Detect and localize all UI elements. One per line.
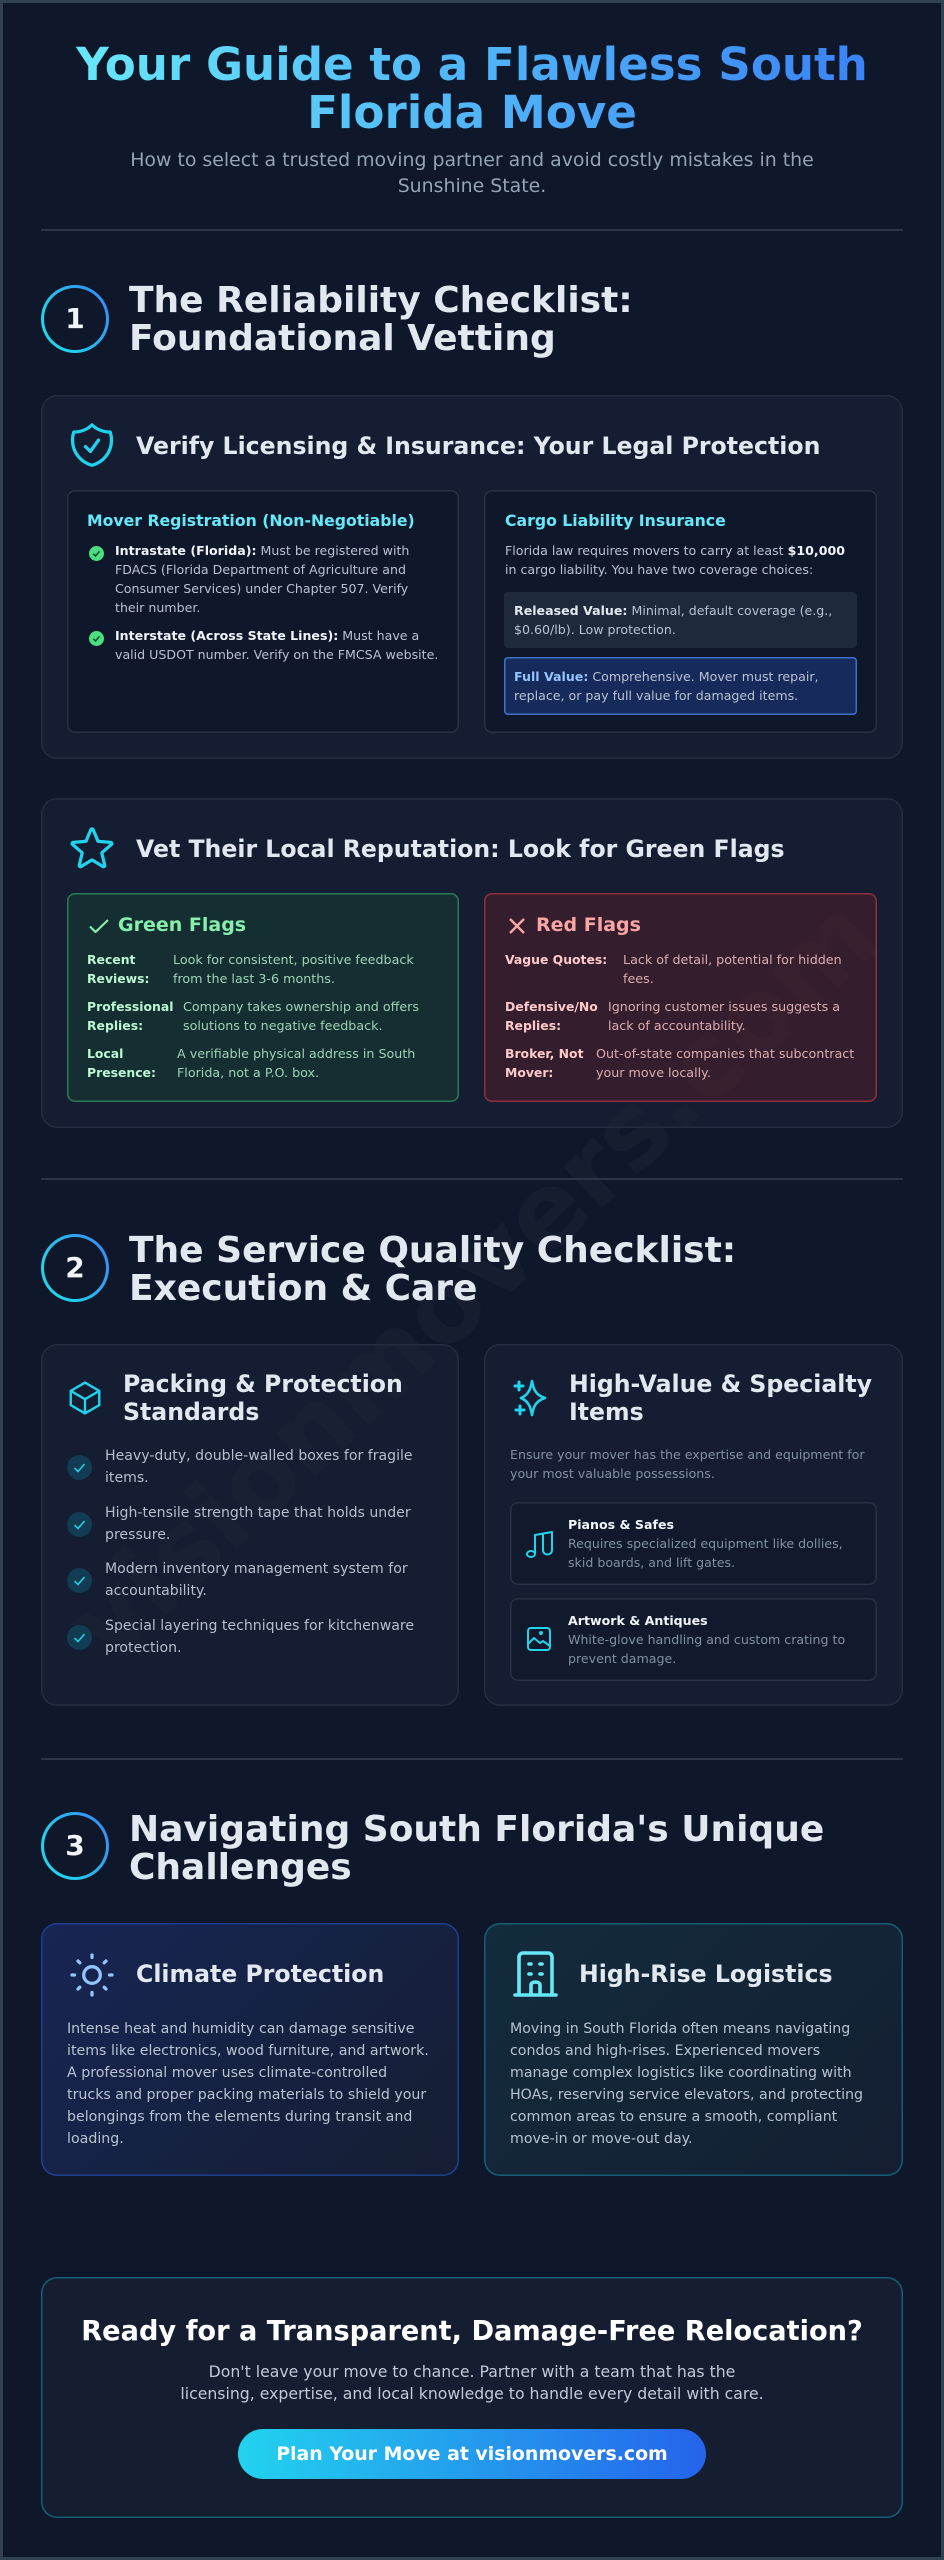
pianos title: Pianos & Safes — [568, 1516, 674, 1532]
icon: music note — [526, 1531, 553, 1558]
panel: high-value items — [484, 1344, 903, 1706]
heading text 3: Challenges — [129, 1846, 352, 1888]
icon: check mark — [89, 919, 109, 933]
pianos text: skid boards, and lift gates. — [568, 1554, 735, 1570]
interstate requirement: Interstate (Across State Lines): Must have a — [115, 628, 419, 642]
panel heading: Items — [569, 1398, 644, 1426]
heading text 2: Execution & Care — [129, 1268, 477, 1308]
section heading 2 — [41, 1230, 736, 1308]
released value option — [504, 592, 857, 648]
local presence — [87, 1046, 415, 1080]
intrastate requirement: FDACS (Florida Department of Agriculture and — [115, 562, 406, 576]
professional replies: solutions to negative feedback. — [183, 1018, 382, 1033]
cargo liability text: Florida law requires movers to carry at least $10,000 — [505, 542, 845, 558]
high-rise text: move-in or move-out day. — [510, 2131, 693, 2147]
broker not mover — [505, 1046, 854, 1080]
heading text 2: The Service Quality Checklist: — [129, 1230, 736, 1270]
interstate requirement: valid USDOT number. Verify on the FMCSA website. — [115, 646, 438, 662]
recent reviews: from the last 3-6 months. — [173, 970, 335, 986]
check item 2: pressure. — [105, 1527, 170, 1543]
number badge 1: 1 — [65, 302, 85, 335]
intrastate requirement: their number. — [115, 600, 200, 614]
heading text 2 — [129, 1230, 736, 1308]
panel: packing standards — [41, 1344, 459, 1706]
artwork text: prevent damage. — [568, 1650, 676, 1666]
panel: climate protection — [41, 1923, 459, 2176]
number badge 2: 2 — [65, 1251, 85, 1284]
defensive replies: Replies: — [505, 1018, 561, 1033]
icon: x mark — [509, 918, 525, 934]
icon: picture — [527, 1627, 551, 1651]
high-rise text: Moving in South Florida often means navigating — [510, 2021, 850, 2037]
recent reviews — [87, 952, 414, 986]
icon: green check — [89, 631, 104, 646]
heading text 1: Foundational Vetting — [129, 318, 556, 358]
vague quotes: fees. — [623, 970, 654, 986]
vague quotes: Vague Quotes: — [505, 952, 607, 966]
panel heading: Climate Protection — [136, 1960, 384, 1988]
cargo liability box — [484, 490, 877, 733]
call to action text — [41, 2361, 903, 2405]
check item 3: accountability. — [105, 1583, 207, 1599]
panel: verify licensing and insurance — [41, 395, 903, 759]
icon: shield check — [70, 423, 114, 467]
check item 1: items. — [105, 1470, 149, 1486]
defensive replies: Ignoring customer issues suggests a — [608, 999, 840, 1014]
released value option: $0.60/lb). Low protection. — [514, 622, 676, 637]
local presence: A verifiable physical address in South — [177, 1046, 415, 1061]
title — [72, 41, 872, 137]
broker not mover: Out-of-state companies that subcontract — [596, 1046, 854, 1061]
panel heading: Standards — [123, 1398, 259, 1426]
cargo liability heading: Cargo Liability Insurance — [505, 511, 726, 530]
cargo liability text: in cargo liability. You have two coverage choices: — [505, 562, 813, 576]
icon: building — [513, 1951, 558, 1997]
recent reviews: Look for consistent, positive feedback — [173, 952, 414, 966]
pianos text: Requires specialized equipment like dollies, — [568, 1536, 843, 1550]
check item 3: Modern inventory management system for — [105, 1561, 408, 1577]
heading text 3 — [129, 1808, 824, 1888]
watermark: visionmovers.com — [43, 874, 901, 1686]
climate text: loading. — [67, 2131, 124, 2147]
heading text 1 — [129, 280, 633, 358]
subtitle: How to select a trusted moving partner and avoid costly mistakes in the — [130, 149, 814, 171]
recent reviews: Recent — [87, 952, 135, 966]
panel heading — [123, 1370, 403, 1426]
defensive replies — [505, 999, 840, 1033]
climate text — [67, 2021, 429, 2147]
mover registration heading: Mover Registration (Non-Negotiable) — [87, 511, 415, 530]
call to action heading: Ready for a Transparent, Damage-Free Relocation? — [81, 2316, 863, 2347]
local presence: Local — [87, 1046, 123, 1061]
number badge 1 — [41, 285, 109, 353]
number badge 2 — [41, 1234, 109, 1302]
panel heading: Packing & Protection — [123, 1370, 403, 1398]
recent reviews: Reviews: — [87, 970, 149, 986]
check item 2 — [67, 1505, 411, 1543]
check item 3 — [67, 1561, 408, 1599]
full value option: Full Value: Comprehensive. Mover must repair, — [514, 669, 819, 684]
defensive replies: Defensive/No — [505, 999, 598, 1014]
subtitle — [130, 149, 814, 196]
panel heading: High-Value & Specialty — [569, 1370, 872, 1398]
intrastate requirement: Consumer Services) under Chapter 507. Verify — [115, 580, 408, 596]
climate text: belongings from the elements during transit and — [67, 2109, 412, 2125]
pianos text — [568, 1536, 843, 1570]
check item 4 — [67, 1618, 414, 1656]
climate text: items like electronics, wood furniture, and artwork. — [67, 2043, 429, 2059]
intrastate requirement: Intrastate (Florida): Must be registered with — [115, 542, 409, 558]
broker not mover: Mover: — [505, 1065, 553, 1080]
artwork title: Artwork & Antiques — [568, 1612, 708, 1628]
professional replies: Professional — [87, 999, 173, 1014]
call to action button: Plan Your Move at visionmovers.com — [276, 2443, 668, 2465]
green flags box — [67, 893, 459, 1102]
full value option: replace, or pay full value for damaged items. — [514, 688, 798, 703]
check list — [67, 1448, 414, 1656]
high-rise text: HOAs, reserving service elevators, and protecting — [510, 2087, 863, 2103]
panel heading: Verify Licensing & Insurance: Your Legal Protection — [136, 432, 820, 460]
section heading 3 — [41, 1808, 824, 1888]
vague quotes: Lack of detail, potential for hidden — [623, 952, 842, 966]
call to action text: licensing, expertise, and local knowledge to handle every detail with care. — [180, 2384, 764, 2403]
heading text 1: The Reliability Checklist: — [129, 280, 633, 320]
title: Your Guide to a Flawless South — [76, 38, 868, 91]
check item 2: High-tensile strength tape that holds under — [105, 1505, 411, 1521]
mover registration box — [67, 490, 459, 733]
call to action panel — [41, 2277, 903, 2518]
climate text: trucks and proper packing materials to shield your — [67, 2087, 426, 2103]
high-rise text: condos and high-rises. Experienced movers — [510, 2043, 820, 2059]
icon: sparkles — [514, 1380, 546, 1416]
vague quotes — [505, 952, 842, 986]
artwork text: White-glove handling and custom crating to — [568, 1632, 845, 1646]
panel: high-rise logistics — [484, 1923, 903, 2176]
section heading 1 — [41, 280, 633, 358]
professional replies: Replies: — [87, 1018, 143, 1033]
broker not mover: your move locally. — [596, 1065, 711, 1080]
intro text — [510, 1446, 865, 1480]
check item 1 — [67, 1448, 413, 1486]
panel: local reputation — [41, 798, 903, 1128]
check item 1: Heavy-duty, double-walled boxes for fragile — [105, 1448, 413, 1464]
icon: star — [70, 827, 114, 868]
professional replies — [87, 999, 419, 1033]
intro text: your most valuable possessions. — [510, 1466, 715, 1480]
check item 4: Special layering techniques for kitchenware — [105, 1618, 414, 1634]
interstate requirement — [115, 628, 438, 662]
panel heading: Vet Their Local Reputation: Look for Green Flags — [136, 835, 785, 863]
broker not mover: Broker, Not — [505, 1046, 584, 1061]
red flags box — [484, 893, 877, 1102]
icon: sun — [70, 1953, 114, 1997]
number badge 3: 3 — [65, 1829, 85, 1862]
green flags heading: Green Flags — [118, 914, 246, 936]
heading text 3: Navigating South Florida's Unique — [129, 1808, 824, 1850]
local presence: Florida, not a P.O. box. — [177, 1065, 319, 1080]
intro text: Ensure your mover has the expertise and equipment for — [510, 1446, 865, 1462]
panel heading — [569, 1370, 872, 1426]
item: artwork and antiques — [510, 1598, 877, 1681]
climate text: A professional mover uses climate-controlled — [67, 2065, 387, 2081]
local presence: Presence: — [87, 1065, 156, 1080]
high-rise text: common areas to ensure a smooth, compliant — [510, 2109, 837, 2125]
artwork text — [568, 1632, 845, 1666]
high-rise text — [510, 2021, 863, 2147]
icon: green check — [89, 546, 104, 561]
check item 4: protection. — [105, 1640, 181, 1656]
number badge 3 — [41, 1812, 109, 1880]
call to action button — [238, 2429, 706, 2479]
call to action text: Don't leave your move to chance. Partner with a team that has the — [209, 2362, 735, 2381]
full value option — [504, 657, 857, 715]
cargo liability text — [505, 542, 845, 576]
intrastate requirement — [115, 542, 409, 614]
title: Florida Move — [307, 86, 637, 139]
released value option: Released Value: Minimal, default coverage (e.g., — [514, 603, 832, 618]
high-rise text: manage complex logistics like coordinating with — [510, 2065, 852, 2081]
panel heading: High-Rise Logistics — [579, 1960, 832, 1988]
climate text: Intense heat and humidity can damage sensitive — [67, 2021, 414, 2037]
item: pianos and safes — [510, 1502, 877, 1585]
red flags heading: Red Flags — [536, 914, 641, 936]
defensive replies: lack of accountability. — [608, 1018, 746, 1033]
icon: box — [70, 1381, 100, 1415]
professional replies: Company takes ownership and offers — [183, 999, 419, 1014]
subtitle: Sunshine State. — [398, 174, 546, 196]
